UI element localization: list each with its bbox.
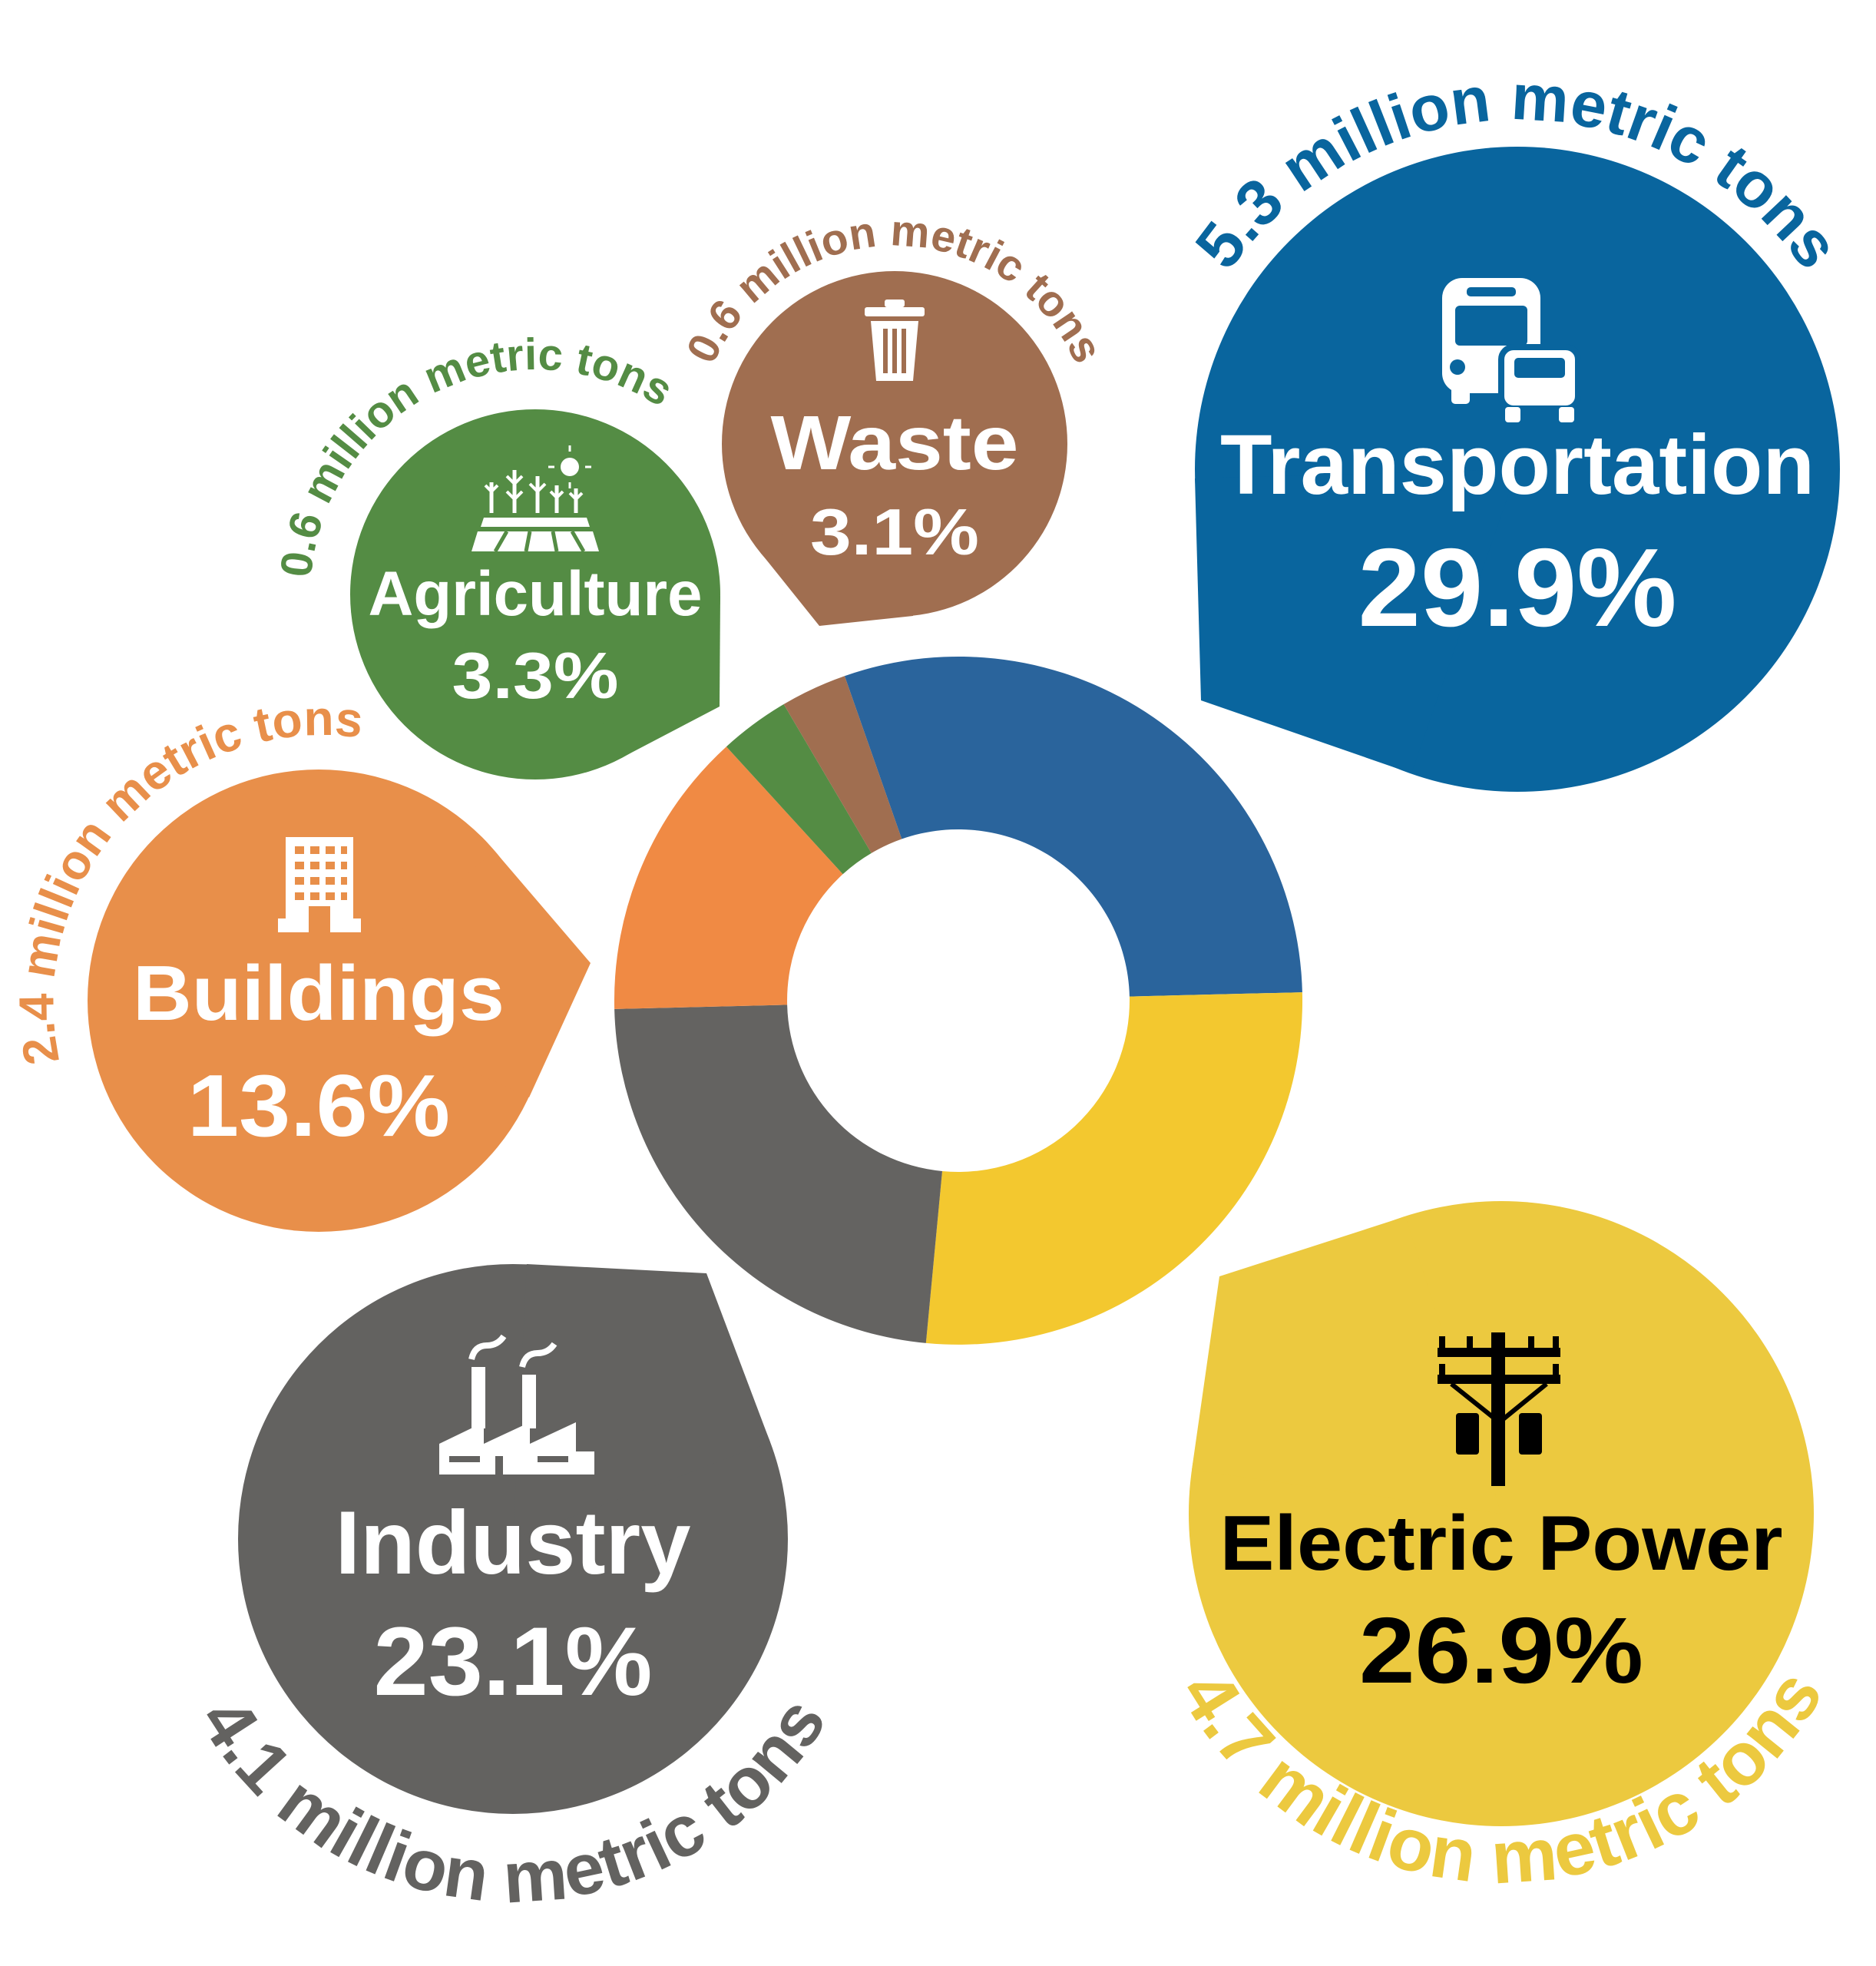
- text: 13.6%: 13.6%: [187, 1057, 450, 1155]
- bubble: electric power: [1187, 1201, 1818, 1883]
- bubble: agriculture: [281, 337, 720, 779]
- label: agriculture tons: 0.6 million metric tons: [281, 337, 668, 575]
- icon: building: [278, 837, 361, 932]
- text: 23.1%: 23.1%: [373, 1607, 653, 1716]
- text: electric power: Electric Power: [1219, 1501, 1783, 1587]
- label: transportation tons: 5.3 million metric tons: [1195, 84, 1828, 267]
- icon: factory: [439, 1336, 594, 1474]
- bubble: industry: [207, 1264, 822, 1903]
- label: industry tons: 4.1 million metric tons: [207, 1706, 822, 1903]
- bubble: transportation: [1195, 84, 1840, 792]
- text: waste: Waste: [771, 400, 1018, 486]
- text: industry: Industry: [335, 1492, 691, 1593]
- bubble: buildings: [19, 708, 591, 1232]
- label: electric power tons: 4.7 million metric tons: [1187, 1679, 1818, 1883]
- text: buildings: Buildings: [133, 951, 505, 1037]
- icon: power pole: [1438, 1332, 1560, 1486]
- icon: crops field: [471, 445, 599, 551]
- icon: trash can: [865, 300, 925, 381]
- text: 3.3%: 3.3%: [452, 640, 619, 713]
- label: buildings tons: 2.4 million metric tons: [19, 708, 361, 1064]
- icon: bus and car: [1442, 278, 1578, 422]
- text: 26.9%: 26.9%: [1359, 1598, 1643, 1703]
- donut chart: [614, 657, 1302, 1345]
- text: 3.1%: 3.1%: [810, 496, 979, 569]
- text: 29.9%: 29.9%: [1358, 525, 1677, 650]
- label: waste tons: 0.6 million metric tons: [689, 222, 1095, 362]
- bubble: waste: [689, 222, 1095, 626]
- text: transportation: Transportation: [1220, 418, 1815, 512]
- text: agriculture: Agriculture: [369, 559, 702, 629]
